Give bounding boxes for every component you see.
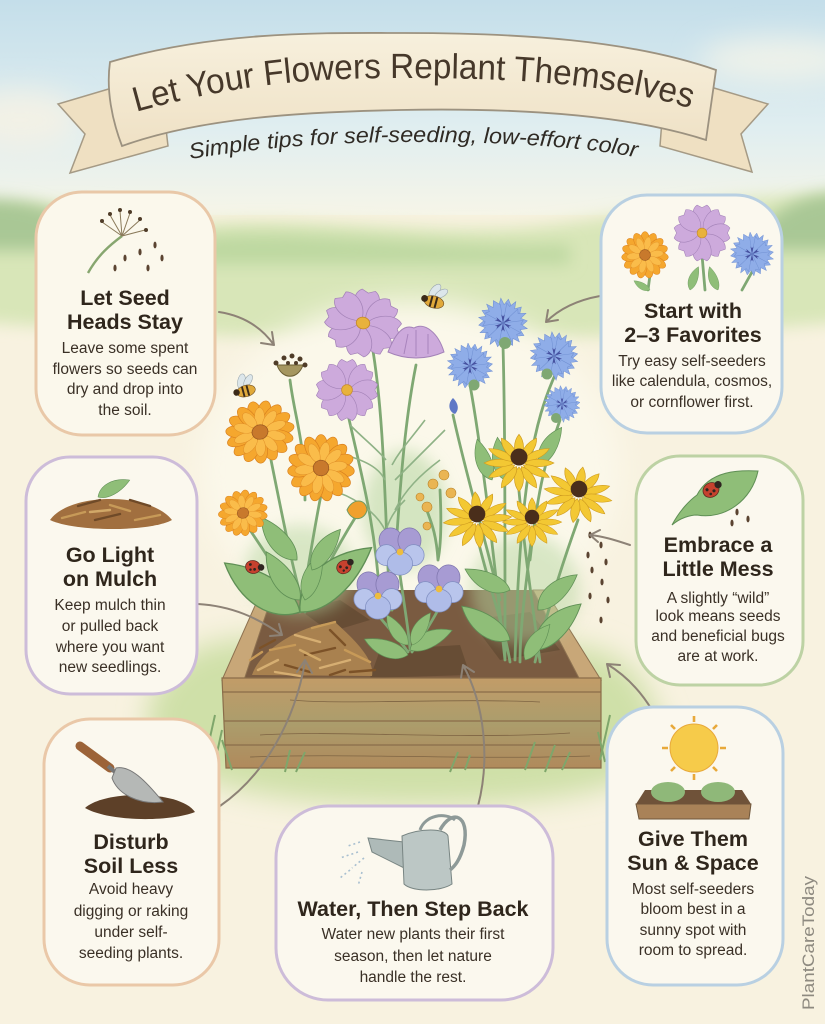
icon: watering can	[340, 816, 465, 890]
body text: and beneficial bugs	[651, 628, 785, 645]
heading: Water, Then Step Back	[298, 897, 529, 921]
body text: bloom best in a	[640, 901, 746, 918]
raised garden bed	[222, 590, 601, 768]
falling seeds	[586, 532, 610, 623]
body text: room to spread.	[639, 942, 747, 959]
body text: or pulled back	[62, 618, 158, 635]
panel: sun and space	[607, 707, 783, 985]
watermark: PlantCareToday	[800, 875, 818, 1010]
icon: three flowers	[621, 205, 775, 293]
body text: Keep mulch thin	[54, 597, 166, 614]
heading: Soil Less	[84, 854, 178, 878]
body text: flowers so seeds can	[53, 361, 197, 378]
body text: the soil.	[98, 402, 152, 419]
arrows	[198, 296, 652, 806]
body text: seeding plants.	[79, 945, 183, 962]
panel: water then step back	[276, 806, 553, 1000]
bees	[229, 279, 451, 400]
arrow: soil to patch	[220, 660, 312, 806]
icon: sun over small bed	[636, 716, 751, 819]
body text: under self-	[94, 924, 168, 941]
flower: pansies	[354, 528, 463, 619]
panel: let seed heads stay	[36, 192, 215, 435]
arrow: seed heads to garden	[219, 312, 274, 345]
heading: Disturb	[93, 830, 169, 854]
heading: Embrace a	[664, 533, 773, 557]
icon: leaf, ladybug and seeds	[672, 471, 758, 526]
half-open cosmos	[388, 326, 444, 358]
body text: sunny spot with	[640, 922, 746, 939]
heading: Sun & Space	[627, 851, 759, 875]
small yellow blooms	[416, 470, 456, 530]
icon: trowel in soil	[80, 746, 195, 819]
soil	[236, 590, 588, 684]
flower stems and foliage	[215, 345, 588, 664]
bed front boards	[222, 678, 601, 768]
arrow: mulch to patch	[198, 604, 282, 636]
title text: Let Your Flowers Replant Themselves	[132, 53, 694, 112]
heading: Start with	[644, 299, 742, 323]
arrow: water to bed	[461, 665, 484, 806]
heading: Heads Stay	[67, 310, 183, 334]
flower: black-eyed susan cluster	[441, 434, 617, 551]
body text: season, then let nature	[334, 948, 492, 965]
bed side rails	[222, 590, 601, 680]
mulch patch	[250, 622, 375, 676]
ribbon right tail	[660, 88, 768, 172]
body text: handle the rest.	[360, 969, 466, 986]
body text: Most self-seeders	[632, 881, 754, 898]
body text: Try easy self-seeders	[618, 353, 766, 370]
heading: Give Them	[638, 827, 748, 851]
grass tufts	[205, 715, 610, 772]
flower: calendula cluster	[212, 393, 367, 543]
heading: Let Seed	[80, 286, 170, 310]
heading: 2–3 Favorites	[624, 323, 762, 347]
heading: Little Mess	[662, 557, 774, 581]
panel: disturb soil less	[44, 719, 219, 985]
body text: Water new plants their first	[322, 926, 505, 943]
body text: new seedlings.	[59, 659, 161, 676]
body text: digging or raking	[74, 903, 188, 920]
body text: like calendula, cosmos,	[612, 373, 772, 390]
body text: are at work.	[678, 648, 758, 665]
body text: A slightly “wild”	[667, 590, 769, 607]
ribbon left tail	[58, 88, 168, 173]
heading: on Mulch	[63, 567, 157, 591]
icon: mulch pile with leaf	[50, 474, 172, 529]
icon: dried seed head	[88, 208, 164, 273]
panel: go light on mulch	[26, 457, 197, 694]
body text: or cornflower first.	[630, 394, 754, 411]
panel: start with favorites	[601, 195, 782, 433]
arrow: sun to bed	[607, 664, 652, 710]
panel: embrace a little mess	[636, 456, 803, 685]
body text: where you want	[55, 639, 165, 656]
subtitle: Simple tips for self-seeding, low-effort color	[190, 126, 640, 158]
flower: cosmos cluster	[316, 284, 444, 421]
arrow: favorites to cornflowers	[546, 296, 600, 322]
flower: cornflower cluster	[446, 298, 581, 423]
seed head	[274, 354, 308, 376]
heading: Go Light	[66, 543, 154, 567]
body text: Avoid heavy	[89, 881, 173, 898]
body text: look means seeds	[656, 608, 781, 625]
body text: dry and drop into	[67, 381, 183, 398]
title ribbon	[56, 32, 770, 174]
ribbon banner	[109, 33, 716, 146]
body text: Leave some spent	[62, 340, 189, 357]
arrow: mess to seeds	[590, 530, 630, 545]
ladybugs on leaves	[244, 556, 357, 576]
